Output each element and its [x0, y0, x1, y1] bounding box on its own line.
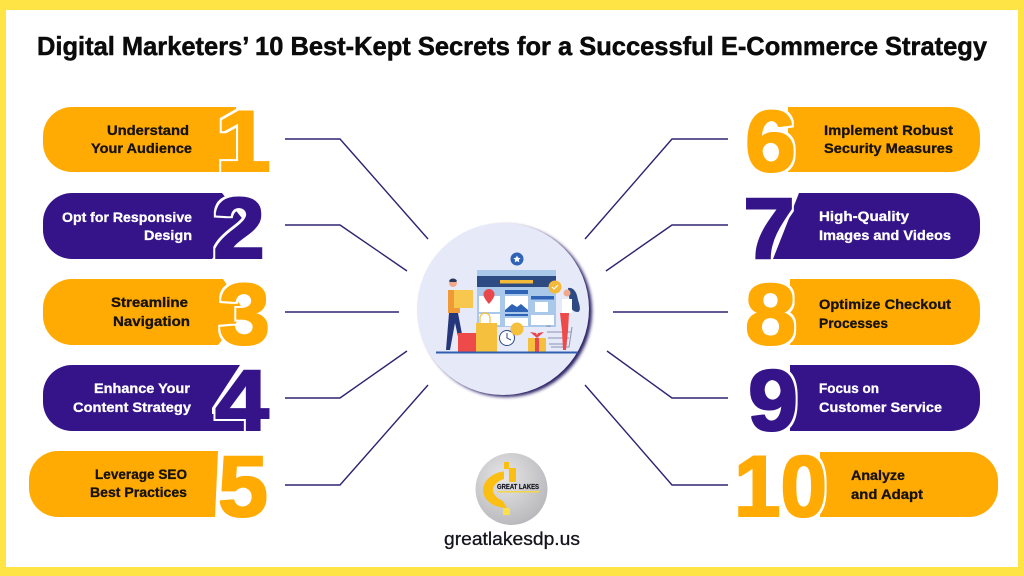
gift box: [528, 332, 546, 352]
item 7: 7: [743, 181, 795, 277]
person left: [446, 279, 473, 350]
item 1: 1: [216, 94, 271, 190]
item 5: Leverage SEO: [95, 466, 187, 482]
item 5: [29, 439, 268, 535]
icon: map pin: [484, 289, 494, 304]
item 7: High-Quality: [819, 208, 909, 224]
item 6: Security Measures: [824, 140, 953, 156]
item 10: Analyze: [851, 467, 905, 483]
item 8: [745, 267, 980, 363]
item 10: and Adapt: [851, 486, 923, 502]
title: Digital Marketers’ 10 Best-Kept Secrets for a Successful E-Commerce Strategy: [37, 31, 988, 61]
item 8: 8: [745, 267, 796, 363]
logo badge: GREAT LAKES: [497, 484, 539, 491]
item 3: [43, 267, 270, 363]
item 9: Focus on: [819, 380, 879, 396]
item 6: [745, 94, 980, 190]
item 4: 4: [215, 353, 269, 449]
item 8: Processes: [819, 315, 888, 331]
person right with cart: [546, 288, 580, 350]
central illustration: [417, 223, 592, 397]
icon: check badge: [548, 280, 562, 294]
connector lines: [285, 139, 728, 485]
item 4: Enhance Your: [94, 380, 191, 396]
item 9: Customer Service: [819, 399, 942, 415]
item 7: Images and Videos: [819, 227, 951, 243]
shopping bags: [458, 313, 497, 352]
browser window: [477, 270, 556, 327]
website url: greatlakesdp.us: [444, 528, 580, 549]
item 5: 5: [218, 439, 268, 535]
item 8: Optimize Checkout: [819, 296, 951, 312]
item 3: 3: [219, 267, 270, 363]
item 3: Navigation: [113, 313, 190, 329]
item 7: [743, 181, 980, 277]
item 4: Content Strategy: [73, 399, 191, 415]
logo badge: [476, 453, 548, 525]
item 6: Implement Robust: [824, 122, 953, 138]
item 9: 9: [748, 353, 798, 449]
item 1: Understand: [107, 122, 189, 138]
item 6: 6: [745, 94, 796, 190]
item 9: [748, 353, 980, 449]
item 2: Opt for Responsive: [62, 209, 192, 225]
item 5: Best Practices: [90, 484, 187, 500]
icon: star badge: [510, 252, 524, 266]
item 2: 2: [213, 181, 265, 277]
item 1: [43, 94, 271, 190]
icon: coin: [510, 322, 524, 336]
icon: clock: [500, 330, 514, 346]
item 10: [734, 439, 998, 535]
item 2: Design: [144, 227, 192, 243]
item 3: Streamline: [111, 294, 188, 310]
item 2: [43, 181, 265, 277]
item 4: [43, 353, 269, 449]
item 1: Your Audience: [91, 140, 192, 156]
item 10: 10: [734, 439, 827, 535]
ground line: [436, 352, 578, 354]
